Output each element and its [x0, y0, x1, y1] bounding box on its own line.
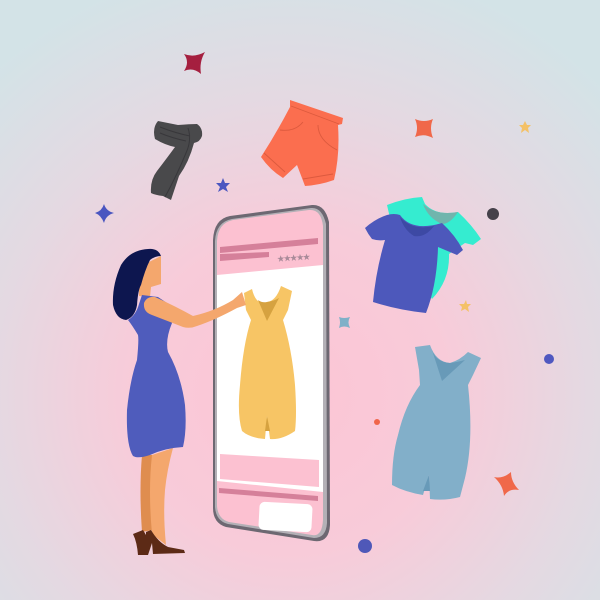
- phone screen: [217, 210, 323, 535]
- price bar: [219, 488, 318, 501]
- icon: teal sparkle: [339, 317, 350, 328]
- neck and face: [139, 256, 161, 297]
- teal shirt collar: [423, 204, 458, 224]
- icon: crimson sparkle: [184, 52, 205, 74]
- phone side highlight: [215, 208, 327, 538]
- buy button: [258, 502, 313, 532]
- icon: blue dot right: [544, 354, 554, 364]
- blue shirt collar: [400, 217, 434, 236]
- hair: [113, 249, 161, 320]
- blue dress: [392, 345, 481, 500]
- shorts: [261, 100, 343, 186]
- icon: yellow star middle: [459, 300, 471, 312]
- yellow dress: [239, 286, 296, 439]
- header bar: [220, 238, 318, 253]
- woman: [113, 249, 246, 555]
- back leg: [140, 455, 154, 532]
- icon: dark dot: [487, 208, 499, 220]
- icon: small red dot: [374, 419, 380, 425]
- scarf: [151, 121, 202, 200]
- arm: [144, 292, 246, 328]
- icon: orange sparkle: [415, 119, 433, 138]
- back shoe: [133, 530, 149, 555]
- blue shirt: [365, 214, 463, 313]
- phone body: [213, 205, 330, 541]
- icon: red sparkle bottom right: [494, 472, 519, 496]
- icon: yellow star top right: [519, 121, 531, 133]
- icon: blue dot bottom: [358, 539, 372, 553]
- phone: [213, 205, 330, 541]
- sub header bar: [220, 252, 269, 261]
- info box: [220, 454, 319, 487]
- icon: blue star: [216, 178, 230, 192]
- blue dress on figure: [127, 295, 186, 457]
- front shoe: [146, 530, 185, 555]
- front leg: [150, 448, 173, 545]
- product area: [217, 265, 323, 492]
- rating stars: ★★★★★: [277, 253, 311, 265]
- teal shirt: [387, 197, 481, 299]
- t-shirts: [365, 197, 481, 313]
- icon: blue sparkle left: [95, 204, 114, 223]
